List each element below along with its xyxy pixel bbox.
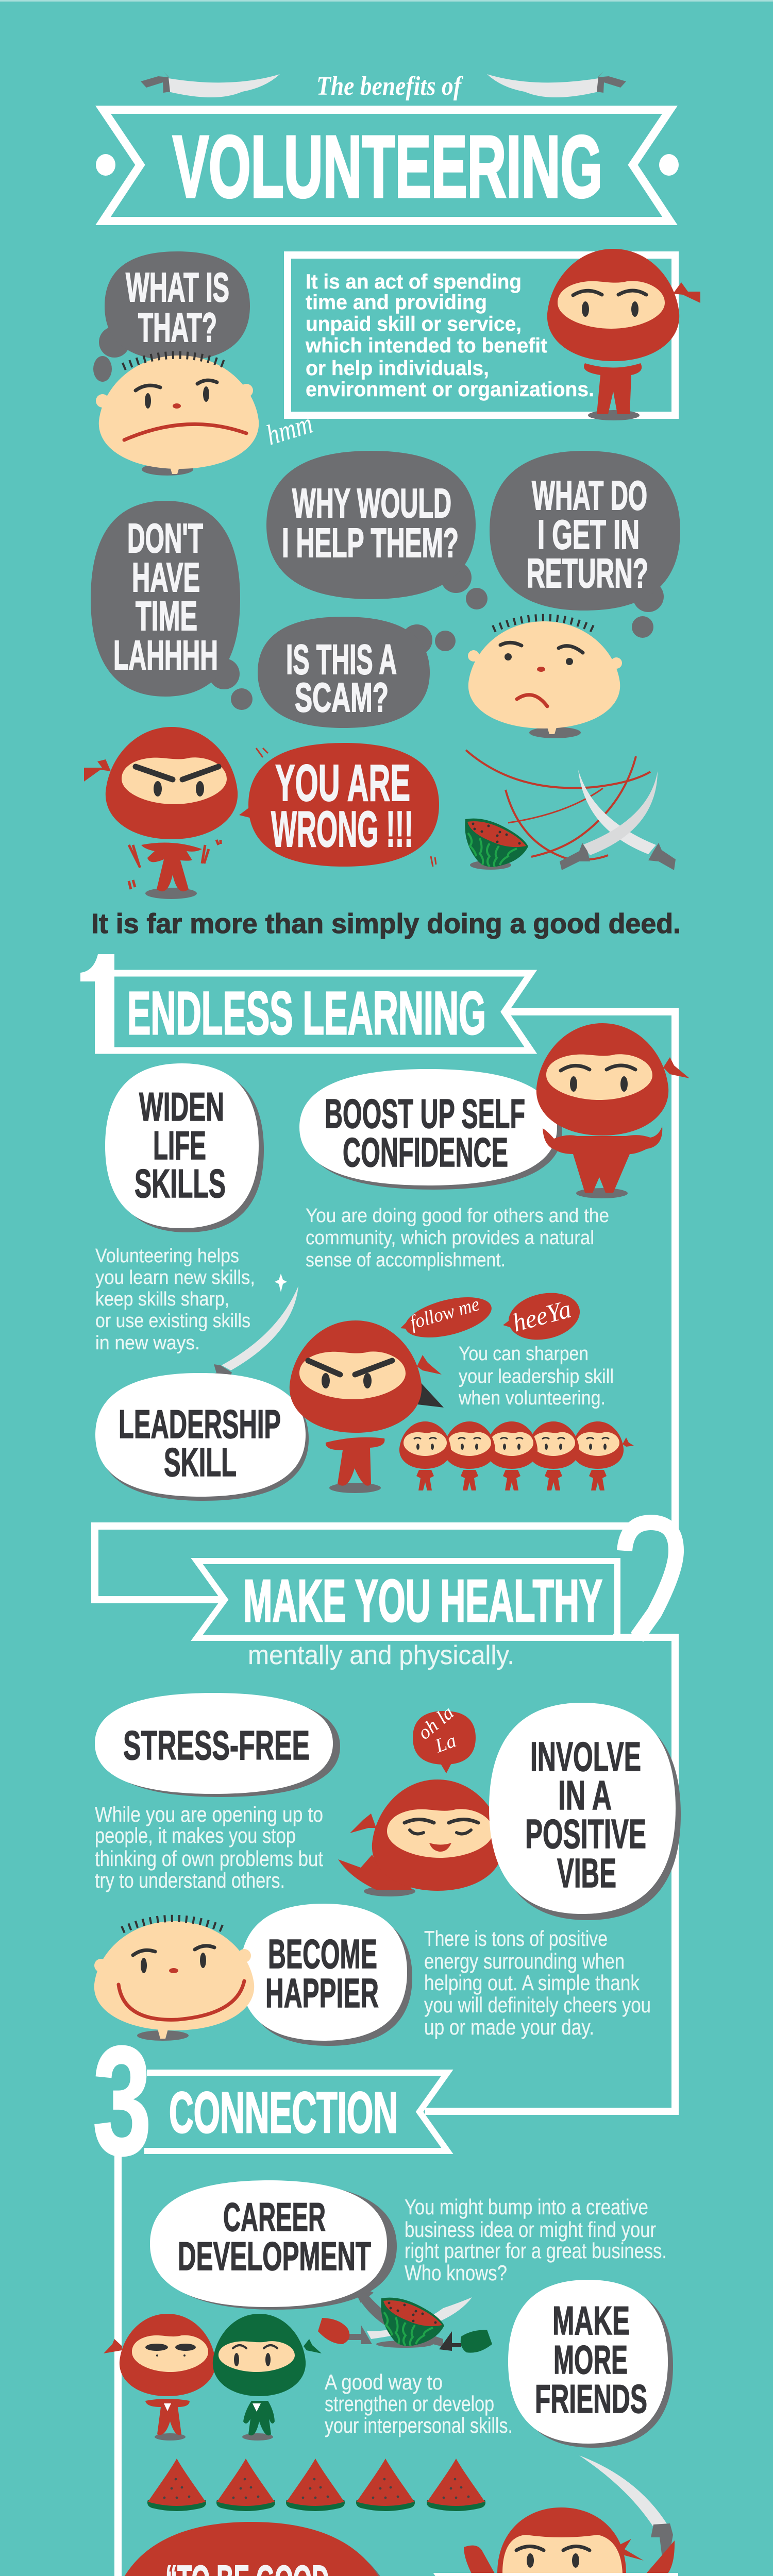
- bubble: leadership skill: SKILL: [164, 1439, 237, 1485]
- text: leadership skill: [458, 1343, 614, 1409]
- bubble: make more friends: MAKE: [552, 2298, 630, 2343]
- character: ninja explaining: [547, 249, 700, 420]
- definition text: environment or organizations.: [306, 378, 594, 401]
- character: doubtful man: [468, 618, 622, 738]
- hmm label: hmm: [263, 408, 316, 451]
- text: make more friends: your interpersonal skills.: [325, 2413, 513, 2437]
- bubble: involve in a positive vibe: VIBE: [557, 1850, 616, 1896]
- connector frame: sections 1 to 2: [95, 1012, 675, 1600]
- speech: follow me: [400, 1290, 496, 1345]
- speech: heeya: [503, 1286, 584, 1346]
- ribbon: [95, 973, 531, 1050]
- text: stress-free: try to understand others.: [95, 1868, 285, 1892]
- ribbon: let's start: [438, 2575, 676, 2576]
- definition text: which intended to benefit: [305, 334, 547, 357]
- text: boost up self confidence: sense of accomplishment.: [306, 1249, 506, 1271]
- thought bubble: is this a scam: IS THIS A: [286, 636, 397, 683]
- character: angry ninja: [84, 727, 238, 899]
- bubble: boost up self confidence: [299, 1069, 562, 1190]
- ribbon: [197, 1561, 617, 1638]
- text: career development: [405, 2195, 667, 2285]
- icon: raised sword: [199, 1274, 298, 1385]
- illustration: watermelon and crossed swords: [465, 750, 676, 870]
- bubble: make more friends: MORE: [553, 2337, 628, 2382]
- bubble: career development: DEVELOPMENT: [178, 2233, 371, 2279]
- bubble: stress-free: [95, 1693, 340, 1797]
- text: boost up self confidence: You are doing good for others and the: [306, 1205, 609, 1227]
- text: stress-free: While you are opening up to: [95, 1802, 323, 1826]
- text: widen life skills: keep skills sharp,: [95, 1289, 229, 1310]
- definition text: unpaid skill or service,: [306, 313, 522, 335]
- section 2 heading: [197, 1522, 676, 1638]
- bubble: career development: CAREER: [223, 2194, 326, 2240]
- speech: oh la la: [413, 1702, 476, 1773]
- thought bubble: what do I get in return: [490, 451, 680, 638]
- text: become happier: you will definitely cheers you: [424, 1993, 651, 2017]
- number 2: [625, 1522, 676, 1637]
- definition text: It is an act of spending: [306, 270, 522, 293]
- section 3 heading: [93, 2014, 447, 2187]
- text: become happier: up or made your day.: [424, 2015, 594, 2039]
- thought bubble: don't have time: HAVE: [132, 554, 200, 600]
- bubble: involve in a positive vibe: IN A: [558, 1772, 612, 1818]
- definition text: or help individuals,: [306, 357, 489, 380]
- bubble: boost up self confidence: BOOST UP SELF: [325, 1091, 525, 1137]
- thought bubble: why would I help them: [266, 451, 488, 609]
- character: proud ninja: [536, 1023, 690, 1198]
- bubble: make more friends: FRIENDS: [535, 2376, 647, 2421]
- character: green ninja friend: [213, 2314, 322, 2441]
- characters: row of small ninjas: [399, 1421, 634, 1490]
- bubble: involve in a positive vibe: INVOLVE: [530, 1734, 641, 1780]
- icon: right sword: [487, 71, 626, 97]
- bubble: make more friends: [508, 2280, 673, 2448]
- character: red ninja friend: [104, 2314, 215, 2441]
- connector frame: section 3: [118, 2151, 407, 2576]
- bubble: become happier: [240, 1904, 412, 2046]
- character: happy ninja: [338, 1780, 503, 1896]
- character: peeking ninja with sword: [464, 2455, 675, 2573]
- speech: oh la la: oh la: [414, 1702, 458, 1744]
- speech: oh la la: La: [432, 1730, 459, 1757]
- text: widen life skills: you learn new skills,: [95, 1267, 255, 1289]
- text: make more friends: A good way to: [325, 2370, 443, 2394]
- thought bubble: what is that: WHAT IS: [126, 264, 229, 310]
- speech bubble: you are wrong: YOU ARE: [275, 754, 410, 812]
- text: leadership skill: You can sharpen: [459, 1343, 589, 1365]
- connector frame: sections 2 to 3: [425, 1637, 675, 2111]
- text: make more friends: [325, 2370, 513, 2437]
- character: confused man: [96, 355, 259, 476]
- section 1 heading: ENDLESS LEARNING: [127, 979, 486, 1047]
- definition text: time and providing: [306, 291, 487, 314]
- bubble: stress-free: STRESS-FREE: [123, 1722, 310, 1768]
- number 3: 3: [93, 2014, 152, 2187]
- bubble: become happier: HAPPIER: [265, 1970, 379, 2016]
- text: stress-free: people, it makes you stop: [95, 1823, 296, 1848]
- text: widen life skills: [95, 1245, 255, 1354]
- speech: follow me: follow me: [408, 1293, 482, 1334]
- subheading: mentally and physically.: [248, 1640, 514, 1670]
- bubble: widen life skills: [105, 1063, 264, 1232]
- text: career development: Who knows?: [405, 2261, 507, 2285]
- text: boost up self confidence: community, which provides a natural: [306, 1227, 594, 1249]
- text: boost up self confidence: [306, 1205, 609, 1271]
- bubble: involve in a positive vibe: [489, 1703, 681, 1920]
- text: leadership skill: when volunteering.: [458, 1387, 606, 1409]
- icon: watermelon with swords: [318, 2293, 492, 2353]
- thought bubble: what is that: THAT?: [138, 304, 217, 350]
- text: widen life skills: or use existing skills: [95, 1310, 250, 1332]
- bubble: widen life skills: WIDEN: [139, 1084, 224, 1129]
- thought bubble: don't have time: DON'T: [127, 515, 203, 561]
- text: career development: business idea or might find your: [405, 2217, 656, 2242]
- bubble: widen life skills: LIFE: [153, 1123, 206, 1168]
- ribbon: [144, 2073, 447, 2151]
- text: become happier: helping out. A simple thank: [424, 1971, 640, 1995]
- call to action ribbon: [405, 2575, 679, 2576]
- text: stress-free: [95, 1802, 323, 1892]
- thought bubble: is this a scam: SCAM?: [295, 674, 389, 720]
- subtitle: The benefits of: [316, 72, 463, 101]
- character: smiling man: [94, 1919, 254, 2041]
- header: title block: [96, 71, 679, 221]
- bubble: boost up self confidence: CONFIDENCE: [343, 1129, 508, 1175]
- text: widen life skills: Volunteering helps: [95, 1245, 239, 1267]
- number 1: [80, 954, 114, 1054]
- tagline: It is far more than simply doing a good deed.: [91, 908, 681, 939]
- thought bubble: what is that: [93, 251, 250, 382]
- thought bubble: why would I help them: WHY WOULD: [292, 480, 451, 526]
- thought bubble: why would I help them: I HELP THEM?: [282, 520, 459, 566]
- bubble: widen life skills: SKILLS: [135, 1161, 226, 1206]
- speech bubble: you are wrong: [239, 743, 439, 867]
- thought bubble: is this a scam: [258, 617, 456, 728]
- title ribbon: [96, 110, 679, 221]
- icons: watermelon slices: [147, 2459, 485, 2511]
- definition panel: [288, 249, 700, 420]
- text: become happier: [424, 1926, 651, 2039]
- section 1 heading: [80, 954, 531, 1054]
- bubble: involve in a positive vibe: POSITIVE: [525, 1811, 646, 1857]
- text: career development: right partner for a great business.: [405, 2239, 667, 2263]
- section 3 heading: CONNECTION: [169, 2080, 398, 2145]
- text: stress-free: thinking of own problems but: [95, 1846, 323, 1871]
- text: widen life skills: in new ways.: [95, 1332, 200, 1354]
- quote bubble: [106, 2522, 402, 2576]
- definition text: [305, 270, 594, 401]
- character: leader ninja: [290, 1320, 444, 1493]
- speech: heeya: heeYa: [509, 1294, 574, 1337]
- thought bubble: don't have time: LAHHHH: [113, 632, 218, 678]
- text: make more friends: strengthen or develop: [325, 2392, 494, 2416]
- bubble: leadership skill: [95, 1373, 309, 1501]
- thought bubble: what do I get in return: RETURN?: [527, 550, 648, 596]
- thought bubble: what do I get in return: WHAT DO: [532, 472, 647, 518]
- text: career development: You might bump into a creative: [405, 2195, 648, 2219]
- text: become happier: energy surrounding when: [424, 1949, 625, 1973]
- speech bubble: you are wrong: WRONG !!!: [271, 801, 413, 857]
- thought bubble: don't have time: TIME: [136, 593, 197, 639]
- text: become happier: There is tons of positive: [424, 1926, 608, 1951]
- text: leadership skill: your leadership skill: [459, 1366, 614, 1387]
- thought bubble: don't have time: [91, 501, 253, 710]
- bubble: career development: [150, 2180, 397, 2310]
- icon: left sword: [141, 71, 280, 97]
- bubble: become happier: BECOME: [268, 1931, 377, 1977]
- thought bubble: what do I get in return: I GET IN: [537, 512, 640, 557]
- bubble: leadership skill: LEADERSHIP: [119, 1401, 281, 1447]
